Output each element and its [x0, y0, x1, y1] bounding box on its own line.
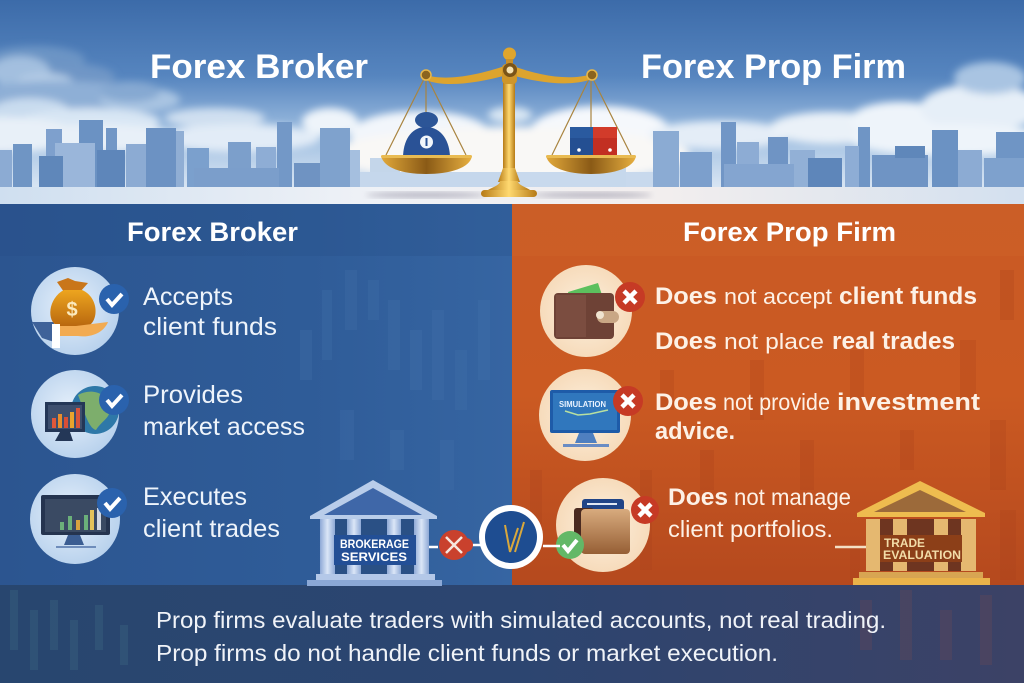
header sky background — [0, 0, 1024, 190]
right panel rows: not provide investment advice — [655, 389, 980, 445]
panel: Forex Broker background — [0, 204, 512, 585]
icon: simulation monitor with cross: SIMULATION — [559, 399, 606, 409]
icon: trade evaluation temple — [853, 481, 990, 585]
right panel rows: not accept client funds: Does — [655, 283, 717, 310]
heading: Forex Prop Firm: Forex Prop Firm — [683, 217, 896, 247]
icon: money bag in hand — [31, 267, 119, 355]
footer text: Prop firms do not handle client funds or market execution. — [156, 640, 778, 666]
city skyline left — [0, 120, 510, 187]
connector: broker to prop firm — [426, 545, 866, 547]
footer text: Prop firms evaluate traders with simulated accounts, not real trading. — [156, 607, 886, 633]
right panel rows: not place real trades — [655, 328, 955, 355]
right panel rows: not accept client funds — [655, 283, 977, 310]
item: provides market access — [31, 370, 305, 458]
icon: money bag in hand: $ — [66, 299, 78, 321]
right panel rows: not provide investment advice: investment — [837, 389, 980, 416]
money bag on left pan — [403, 112, 450, 158]
icon: brokerage services temple: SERVICES — [341, 550, 407, 564]
right panel rows: not provide investment advice: Does — [655, 389, 717, 416]
right panel rows: not provide investment advice: not provide — [723, 389, 830, 415]
icon: brokerage services temple — [307, 480, 442, 586]
icon: golden balance scale — [381, 48, 636, 197]
label: Provides — [143, 381, 243, 409]
header band tint — [0, 204, 1024, 256]
check badge — [99, 284, 129, 314]
icon: simulation monitor with cross — [539, 369, 643, 461]
faint candlestick texture right — [530, 270, 1016, 580]
faint candlestick texture left — [300, 270, 490, 490]
label: client funds — [143, 313, 277, 341]
right panel rows: not manage client portfolios: not manage — [734, 484, 851, 510]
icon: monitor and globe — [31, 370, 119, 458]
icon: central medallion — [479, 505, 543, 569]
floor band — [0, 187, 1024, 204]
right panel rows: not place real trades: Does — [655, 328, 717, 355]
title: Forex Prop Firm: Forex Prop Firm — [641, 48, 906, 86]
label — [143, 483, 280, 543]
bottom band — [0, 585, 1024, 683]
city skyline right — [515, 122, 1024, 187]
icon: trade evaluation temple: TRADE — [884, 538, 925, 550]
label: Executes — [143, 483, 247, 511]
icon: brokerage services temple: BROKERAGE — [340, 539, 409, 551]
item: executes client trades — [30, 474, 280, 564]
title: Forex Broker: Forex Broker — [150, 48, 368, 86]
check badge — [97, 488, 127, 518]
icon: folder portfolio with cross and check — [556, 478, 659, 572]
heading: Forex Broker: Forex Broker — [127, 217, 298, 247]
right panel rows: not place real trades: real trades — [832, 328, 955, 355]
label: market access — [143, 413, 305, 441]
right panel rows: not manage client portfolios — [668, 484, 851, 542]
right panel rows: not accept client funds: not accept — [724, 284, 832, 309]
right panel rows: not accept client funds: client funds — [839, 283, 977, 310]
panel: Forex Prop Firm background — [512, 204, 1024, 585]
icon: trading monitor — [30, 474, 120, 564]
icon: trade evaluation temple: EVALUATION — [883, 548, 961, 562]
label: client trades — [143, 515, 280, 543]
label — [143, 283, 277, 341]
right panel rows: not provide investment advice: advice. — [655, 418, 735, 445]
check badge — [99, 385, 129, 415]
icon: red cross badge — [439, 530, 473, 560]
label — [143, 381, 305, 441]
right panel rows: not manage client portfolios: client portfolios. — [668, 516, 833, 542]
box on right pan — [570, 127, 617, 157]
icon: wallet with cross — [540, 265, 645, 357]
footer text — [156, 607, 886, 666]
item: accepts client funds — [31, 267, 277, 355]
label: Accepts — [143, 283, 233, 311]
right panel rows: not place real trades: not place — [724, 329, 824, 354]
right panel rows: not manage client portfolios: Does — [668, 484, 728, 511]
